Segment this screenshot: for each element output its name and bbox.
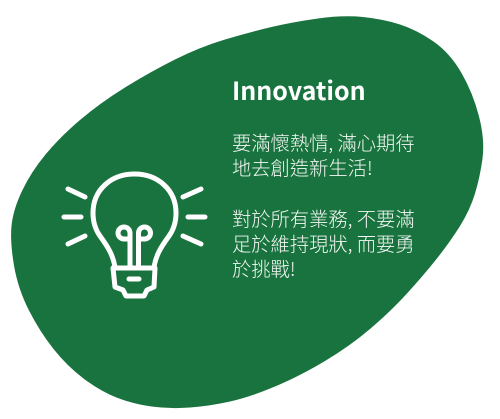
text block: first paragraph bbox=[232, 128, 415, 181]
text block: first paragraph: 要滿懷熱情, 滿心期待 bbox=[232, 128, 415, 156]
text block: first paragraph: 地去創造新生活! bbox=[232, 153, 373, 181]
text block: second paragraph bbox=[232, 204, 415, 282]
text block: second paragraph: 對於所有業務, 不要滿 bbox=[232, 204, 415, 232]
text block: second paragraph: 足於維持現狀, 而要勇 bbox=[232, 229, 415, 257]
title: Innovation bbox=[232, 72, 366, 108]
text block: second paragraph: 於挑戰! bbox=[232, 254, 296, 282]
